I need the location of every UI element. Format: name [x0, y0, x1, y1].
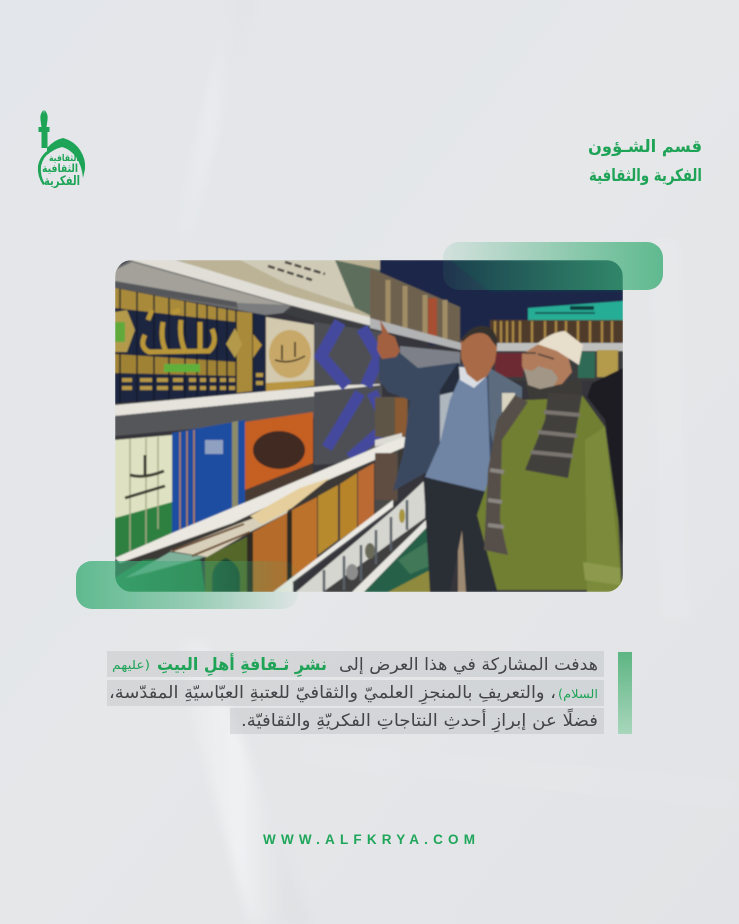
description text block [107, 651, 604, 734]
logo dome [47, 138, 85, 178]
logo calligraphy: الثقافية [49, 154, 79, 164]
face [522, 342, 572, 388]
row two books [115, 412, 313, 558]
bottom green accent bar [76, 561, 298, 609]
shirt collar [459, 367, 487, 388]
dark lapel [440, 362, 460, 395]
top shelf with calligraphy books [115, 260, 382, 327]
line two: السلام) [558, 687, 598, 701]
scarf left strip [484, 395, 528, 555]
department heading [588, 137, 702, 186]
line one: (عليهم [112, 658, 150, 672]
far book wall [489, 319, 623, 379]
website url: WWW.ALFKRYA.COM [263, 832, 475, 847]
Al-Kafi book set [115, 288, 265, 403]
sweater [425, 377, 490, 492]
department heading: الفكرية والثقافية [589, 166, 702, 186]
head [461, 327, 497, 382]
logo minaret [38, 110, 50, 148]
logo calligraphy: الفكرية [44, 174, 80, 189]
robe [477, 395, 622, 590]
line one: نشرِ ثـقافةِ أهلِ البيتِ [157, 653, 327, 678]
scarf neck [530, 386, 560, 400]
fourth shelf with white books [273, 480, 430, 592]
mid-right shelf books [370, 268, 465, 500]
scarf right strip [525, 393, 582, 478]
jacket [378, 353, 494, 491]
line two: ، والتعريفِ بالمنجزِ العلميّ والثقافيّ للعتبةِ العبّاسيّةِ المقدّسة، [109, 683, 556, 705]
third shelf [115, 435, 405, 563]
blue magazine stacks [314, 322, 385, 465]
man in dark jacket [377, 320, 522, 592]
second shelf [115, 381, 380, 416]
raised hand [377, 320, 400, 359]
logo calligraphy [42, 154, 80, 189]
text line highlight bands [107, 651, 604, 734]
photo backdrop and ceiling [115, 260, 623, 592]
line one [112, 653, 598, 678]
far-right man in black [587, 368, 623, 550]
department heading: قسم الشـؤون [588, 137, 702, 157]
badge [502, 393, 515, 412]
line three: فضلًا عن إبرازِ أحدثِ النتاجاتِ الفكريّةِ والثقافيّة. [241, 707, 598, 733]
logo [38, 110, 85, 189]
line one: هدفت المشاركة في هذا العرض إلى [339, 655, 598, 675]
teal sign [528, 301, 623, 321]
trousers [423, 470, 498, 592]
beard [524, 366, 558, 389]
right lapel [488, 368, 522, 442]
top green accent bar [443, 242, 663, 290]
Ayat al-Ahkam cream book [266, 317, 314, 392]
carpet display of green books [364, 524, 432, 592]
green side bar [618, 652, 632, 734]
glasses [524, 353, 554, 359]
sheikh in olive robe [477, 331, 622, 592]
shirt placket [440, 392, 453, 443]
row three books [115, 450, 398, 592]
white cap [537, 331, 583, 365]
floor [456, 530, 467, 592]
photo: visitors at book exhibition [115, 260, 623, 592]
logo calligraphy: الثقافية [42, 162, 78, 175]
